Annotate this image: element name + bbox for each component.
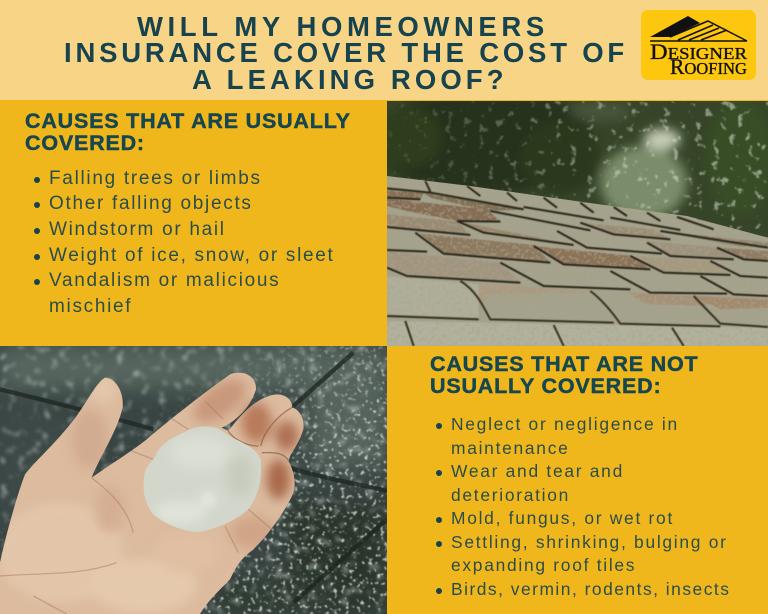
roof surface	[387, 168, 768, 346]
list: not covered causes	[436, 414, 730, 598]
heading: not covered: USUALLY COVERED:	[430, 374, 661, 398]
list: covered causes	[34, 168, 335, 316]
list: covered causes: Falling trees or limbs	[49, 168, 262, 188]
panel: causes not usually covered	[387, 346, 768, 614]
heading: not covered: CAUSES THAT ARE NOT	[430, 352, 698, 376]
list: not covered causes: Settling, shrinking, bulging or	[451, 532, 728, 552]
list: not covered causes: Mold, fungus, or wet rot	[451, 508, 674, 528]
photo: worn roof shingles under trees	[387, 101, 768, 346]
heading: covered: CAUSES THAT ARE USUALLY	[25, 109, 351, 133]
list: covered causes: Windstorm or hail	[49, 218, 226, 240]
title	[64, 10, 628, 95]
title: WILL MY HOMEOWNERS	[137, 10, 549, 42]
list: covered causes: Weight of ice, snow, or sleet	[49, 244, 335, 266]
logo: Designer Roofing: DESIGNER	[650, 39, 748, 64]
heading: not covered	[430, 352, 698, 398]
heading: covered	[25, 109, 351, 154]
logo: Designer Roofing	[641, 10, 756, 80]
title: INSURANCE COVER THE COST OF	[64, 36, 628, 68]
header band	[0, 0, 768, 100]
list: not covered causes: Neglect or negligence in	[451, 414, 679, 434]
list: not covered causes: maintenance	[451, 438, 570, 458]
panel: causes usually covered	[0, 100, 387, 346]
heading: covered: COVERED:	[25, 130, 145, 154]
list: covered causes: mischief	[49, 296, 132, 316]
list: covered causes: Other falling objects	[49, 193, 253, 214]
photo: hand holding hailstone	[0, 346, 387, 614]
hand	[0, 372, 304, 614]
hailstone	[140, 423, 263, 534]
list: not covered causes: expanding roof tiles	[451, 555, 636, 575]
list: not covered causes: Birds, vermin, rodents, insects	[451, 578, 730, 598]
title: A LEAKING ROOF?	[192, 64, 508, 95]
list: covered causes: Vandalism or malicious	[49, 270, 280, 291]
list: not covered causes: Wear and tear and	[451, 461, 624, 481]
list: not covered causes: deterioration	[451, 484, 570, 504]
logo: Designer Roofing: ROOFING	[670, 54, 747, 79]
